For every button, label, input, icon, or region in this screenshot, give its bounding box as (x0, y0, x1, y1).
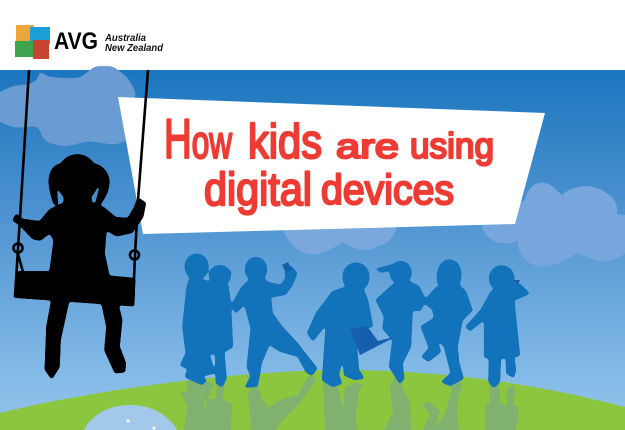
icon: phone held up (282, 262, 292, 273)
hill (0, 370, 625, 430)
pigtail left (50, 165, 60, 203)
body, arms (14, 197, 145, 299)
icon: phone at ear (513, 280, 520, 285)
cloud: right (482, 183, 625, 266)
swing seat (14, 272, 135, 306)
logo mark (15, 25, 50, 59)
logo region text: Australia (104, 33, 146, 44)
kids silhouettes (181, 255, 528, 387)
title: devices (321, 166, 454, 213)
cloud: middle (283, 226, 397, 254)
cloud: upper left (0, 66, 140, 147)
title: How (164, 107, 233, 170)
right leg (103, 303, 125, 372)
bubble at bottom (84, 405, 177, 430)
left leg (46, 300, 68, 377)
title (164, 107, 494, 215)
head (57, 156, 97, 201)
icon: laptop (350, 326, 397, 355)
title: using (410, 125, 494, 166)
logo region text (104, 33, 164, 54)
AVG logo (15, 25, 164, 59)
title: are (336, 128, 399, 166)
banner (118, 97, 545, 234)
title: digital (204, 163, 312, 215)
title: kids (248, 116, 322, 169)
white header band (0, 0, 625, 70)
logo wordmark: AVG (54, 28, 98, 55)
kids reflection on hill (181, 375, 519, 430)
girl on swing (14, 156, 145, 377)
swing and girl silhouette (14, 70, 148, 377)
pigtail right (95, 165, 108, 204)
swing ropes (14, 70, 148, 303)
logo region text: New Zealand (105, 43, 164, 54)
